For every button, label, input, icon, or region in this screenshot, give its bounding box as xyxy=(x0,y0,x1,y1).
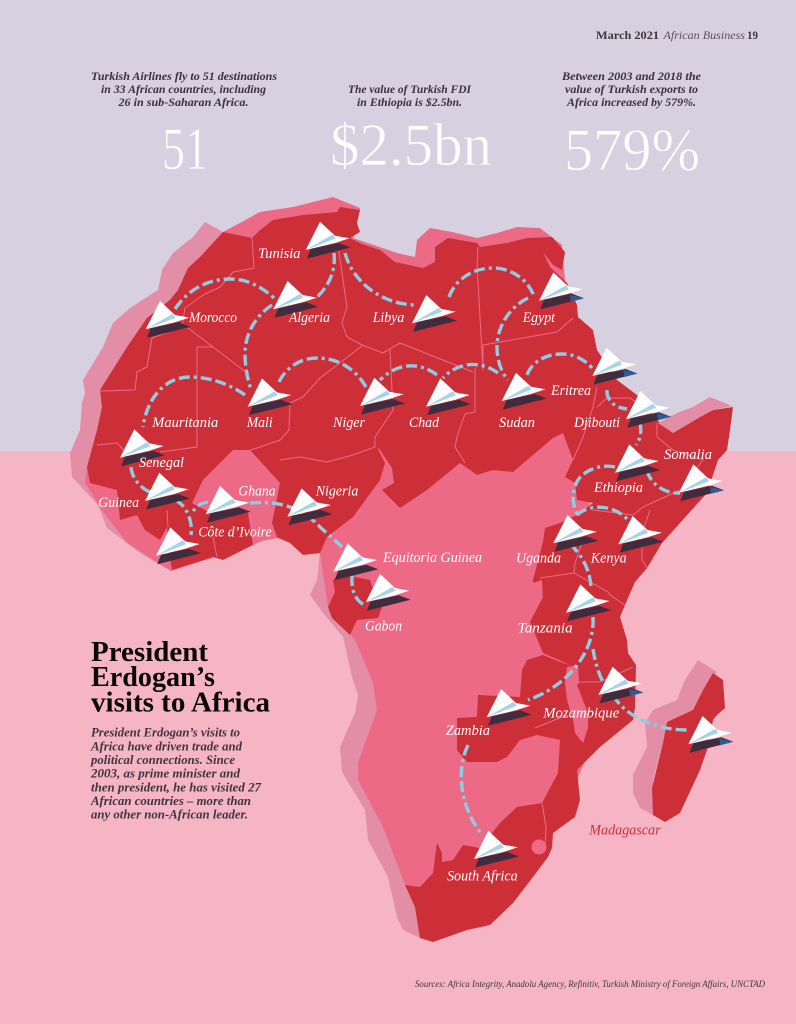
country labels: Chad xyxy=(409,415,439,431)
stat: Turkish Airlines destinations: 51 xyxy=(162,116,208,182)
stat: Turkish FDI in Ethiopia: $2.5bn xyxy=(330,112,492,178)
plane: Gabon xyxy=(366,574,411,611)
title: President xyxy=(91,637,209,668)
country labels: Nigeria xyxy=(315,484,358,500)
plane: South Africa xyxy=(474,831,519,868)
plane: Libya xyxy=(412,295,457,332)
plane: Ghana xyxy=(206,486,251,523)
plane: Morocco xyxy=(146,301,191,338)
country labels: Egypt xyxy=(522,310,556,326)
stat: Turkish FDI in Ethiopia: in Ethiopia is $2.5bn. xyxy=(357,95,462,109)
body text: Africa have driven trade and xyxy=(90,739,242,754)
body text: then president, he has visited 27 xyxy=(91,779,261,794)
body text: African countries – more than xyxy=(90,793,251,808)
plane: Uganda xyxy=(553,515,598,552)
country labels: Libya xyxy=(372,310,404,326)
stat: Turkish exports to Africa: Between 2003 and 2018 the xyxy=(561,69,702,83)
country labels: Madagascar xyxy=(588,822,661,838)
body text: 2003, as prime minister and xyxy=(90,765,240,780)
page header: March 2021 xyxy=(596,28,659,42)
background: pink lower band xyxy=(0,451,796,1024)
country labels: Zambia xyxy=(446,723,490,739)
stat: Turkish Airlines destinations: 26 in sub-Saharan Africa. xyxy=(117,95,248,109)
stat: Turkish exports to Africa: Africa increased by 579%. xyxy=(566,95,696,109)
stat: Turkish exports to Africa: value of Turkish exports to xyxy=(565,82,698,96)
plane: Madagascar xyxy=(688,716,733,753)
map: offset shadow of the north-west coast xyxy=(70,222,223,571)
map: unvisited countries xyxy=(85,197,600,940)
stat: Turkish Airlines destinations: in 33 African countries, including xyxy=(101,82,266,96)
plane: Djibouti xyxy=(626,391,671,428)
country labels: Somalia xyxy=(664,447,712,463)
stat: Turkish Airlines destinations xyxy=(91,69,277,182)
country labels xyxy=(98,246,712,885)
body text: any other non-African leader. xyxy=(91,806,248,821)
plane: Niger xyxy=(360,378,405,414)
plane: Nigeria xyxy=(287,488,332,525)
map: country borders xyxy=(97,237,703,848)
plane: Egypt xyxy=(539,272,584,309)
stat: Turkish exports to Africa: 579% xyxy=(564,117,700,183)
country labels: Gabon xyxy=(365,619,402,635)
country labels: Morocco xyxy=(188,310,237,326)
page header: African Business xyxy=(662,28,745,42)
plane: Equatorial Guinea xyxy=(333,543,378,580)
stat: Turkish FDI in Ethiopia xyxy=(330,82,492,178)
country labels: Tunisia xyxy=(258,246,300,262)
title xyxy=(91,637,270,719)
country labels: Niger xyxy=(332,415,365,431)
map: offset shadow of the south-west coast xyxy=(310,552,425,938)
plane: Senegal xyxy=(120,429,165,466)
background: lavender upper band xyxy=(0,0,796,451)
country labels: Ghana xyxy=(238,484,276,500)
plane: Zambia xyxy=(487,689,532,726)
country labels: Côte d’Ivoire xyxy=(198,525,272,541)
map: offset shadow of the Horn of Africa xyxy=(658,397,732,433)
country labels: Ethiopia xyxy=(593,480,643,496)
plane: Ethiopia xyxy=(615,444,660,481)
plane: Cote d'Ivoire xyxy=(156,527,201,564)
map: visited countries, north, west and east xyxy=(87,207,733,942)
flight routes xyxy=(131,253,687,832)
country labels: Uganda xyxy=(516,551,561,567)
map of Africa xyxy=(70,197,733,942)
country labels: Mozambique xyxy=(542,706,620,722)
plane: Chad xyxy=(426,378,471,415)
map: Eswatini xyxy=(532,840,546,854)
plane: Algeria xyxy=(273,281,318,318)
plane: Kenya xyxy=(618,516,663,553)
body text xyxy=(90,725,261,821)
map: Zambia xyxy=(457,655,580,762)
plane: Tunisia xyxy=(306,222,351,258)
country labels: Equitoria Guinea xyxy=(382,550,482,566)
country labels: Senegal xyxy=(139,455,184,471)
country labels: South Africa xyxy=(447,869,518,885)
plane: Guinea xyxy=(145,473,190,510)
plane: Somalia xyxy=(679,464,724,501)
stat: Turkish FDI in Ethiopia: The value of Turkish FDI xyxy=(348,82,472,96)
map: Madagascar shadow xyxy=(633,660,717,815)
stat: Turkish exports to Africa xyxy=(561,69,702,183)
plane: Sudan xyxy=(502,373,547,410)
country labels: Kenya xyxy=(590,551,627,567)
plane: Eritrea xyxy=(592,348,637,384)
title: visits to Africa xyxy=(91,688,270,719)
title: Erdogan’s xyxy=(91,662,215,693)
page header: 19 xyxy=(747,28,758,42)
country labels: Tanzania xyxy=(518,621,573,637)
sources: Sources: Africa Integrity, Anadolu Agency, Refinitiv, Turkish Ministry of Foreign Affairs, UNCTAD xyxy=(415,979,765,990)
country labels: Djibouti xyxy=(573,415,620,431)
plane: Mali xyxy=(248,378,293,415)
body text: President Erdogan’s visits to xyxy=(91,725,240,740)
country labels: Mauritania xyxy=(151,415,218,431)
map: Madagascar xyxy=(652,673,725,822)
map: Malawi xyxy=(565,665,588,743)
map: Gabon and Equatorial Guinea xyxy=(328,575,382,635)
country labels: Eritrea xyxy=(550,383,591,399)
page header xyxy=(596,28,758,42)
country labels: Mali xyxy=(246,415,273,431)
stat: Turkish Airlines destinations: Turkish Airlines fly to 51 destinations xyxy=(91,69,277,83)
plane: Mozambique xyxy=(598,667,643,704)
country labels: Guinea xyxy=(98,495,139,511)
country labels: Sudan xyxy=(499,415,535,431)
country labels: Algeria xyxy=(288,310,330,326)
plane: Tanzania xyxy=(566,584,611,621)
body text: political connections. Since xyxy=(90,752,235,767)
